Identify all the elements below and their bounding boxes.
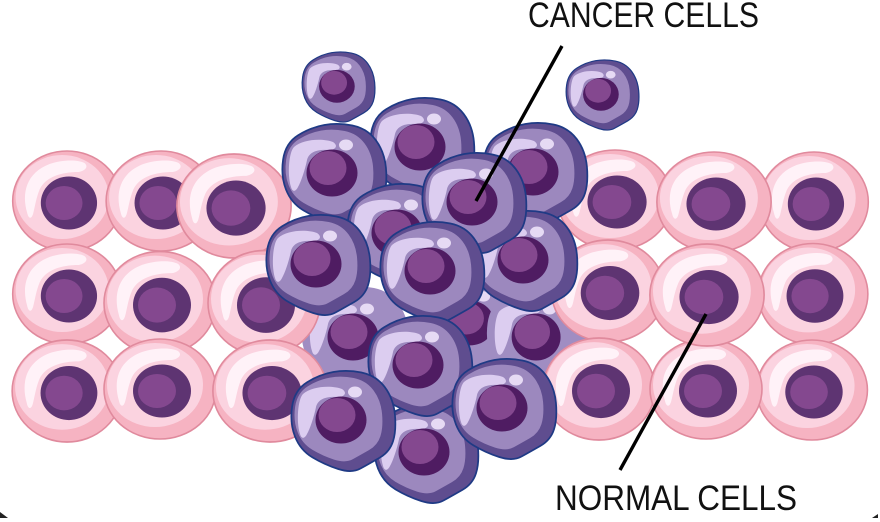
- faded back cancer cell: [302, 286, 409, 390]
- normal cell: [650, 339, 762, 439]
- normal cell: [558, 150, 672, 250]
- normal cell: [757, 340, 867, 440]
- cancer cell: [370, 98, 474, 198]
- cancer cell: [374, 403, 478, 503]
- cancer cell: [291, 371, 395, 471]
- bottom-left corner mark: [0, 512, 8, 518]
- panel: faded cancer cells behind the normal cells: [302, 275, 590, 390]
- normal cell: [657, 152, 771, 252]
- detached cancer cell: [566, 60, 639, 130]
- panel: normal cells, right side: [543, 150, 868, 440]
- normal cell: [13, 244, 121, 344]
- panel: cancer cell cluster: [266, 52, 639, 503]
- normal cell: [760, 152, 868, 252]
- heading: normal cells label: NORMAL CELLS: [555, 479, 797, 518]
- normal cell: [12, 340, 122, 442]
- cancer cell: [483, 123, 587, 223]
- cancer cell: [452, 359, 556, 459]
- cancer cell, pointed to by leader line: [422, 153, 526, 253]
- cancer cell: [473, 211, 577, 311]
- cancer cell: [368, 316, 472, 416]
- bottom-right corner mark: [872, 514, 878, 518]
- cancer cell: [347, 184, 451, 284]
- normal cell: [208, 250, 320, 356]
- detached cancer cell: [302, 52, 375, 122]
- normal cell: [13, 151, 121, 251]
- arrow: cancer cells leader line: [476, 46, 562, 201]
- cancer cell: [266, 215, 370, 315]
- normal cell: [104, 339, 216, 439]
- normal cell: [551, 240, 665, 342]
- panel: normal cells, left side: [12, 151, 327, 442]
- normal cell: [213, 340, 327, 442]
- faded back cancer cell: [487, 286, 590, 390]
- normal cell: [177, 154, 291, 258]
- normal cell: [758, 244, 868, 344]
- faded back cancer cell: [421, 275, 523, 373]
- cancer cell: [282, 124, 386, 224]
- normal cell: [543, 338, 655, 440]
- normal cell: [104, 252, 216, 354]
- arrow: normal cells leader line: [620, 314, 706, 470]
- cancer cell: [380, 222, 484, 322]
- normal cell, highlighted by leader line: [650, 244, 764, 346]
- normal cell: [106, 151, 216, 251]
